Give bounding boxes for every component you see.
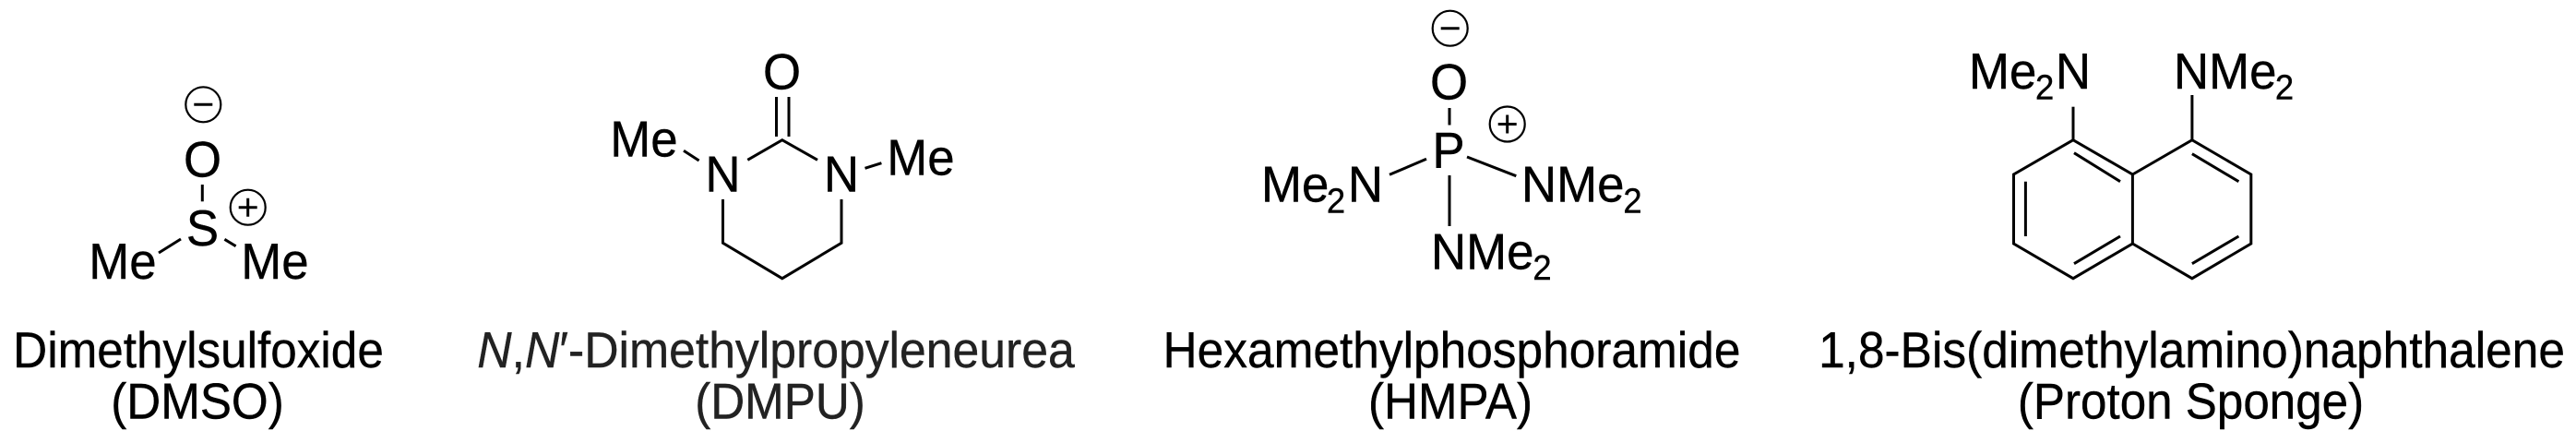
bond: lower P-N [1449, 175, 1450, 226]
ring: naphthalene skeleton [2013, 140, 2251, 279]
bond: left N-Me [684, 150, 699, 161]
icon: positive charge [1490, 107, 1525, 142]
atom: oxygen: O [1430, 54, 1468, 111]
atom: sulfur: S [186, 200, 219, 257]
structure: DMSO molecule [89, 87, 309, 290]
group: right dimethylamino: NMe [2174, 43, 2276, 100]
label: DMPU name: N,N′-Dimethylpropyleneurea [477, 323, 1075, 378]
panel: DMSO [13, 87, 384, 430]
group: left dimethylamino: Me [1261, 156, 1329, 213]
group: lower dimethylamino: NMe [1431, 224, 1533, 281]
label: HMPA abbreviation: (HMPA) [1368, 374, 1532, 430]
atom: carbonyl oxygen: O [763, 44, 801, 101]
structure: HMPA molecule [1261, 11, 1642, 287]
label: HMPA name: Hexamethylphosphoramide [1163, 322, 1740, 378]
group: lower dimethylamino: 2 [1532, 248, 1552, 287]
atom: left nitrogen: N [705, 147, 741, 203]
label: DMSO abbreviation: (DMSO) [111, 374, 284, 430]
atom: left methyl: Me [89, 233, 157, 290]
group: right dimethylamino: NMe [1521, 156, 1624, 213]
panel: DMPU [477, 44, 1075, 430]
icon: negative charge [185, 87, 221, 122]
bond: P-O [1449, 108, 1450, 126]
panel: HMPA [1163, 11, 1740, 430]
bond: right N-Me [865, 163, 881, 168]
bond: left C-N [2072, 107, 2074, 140]
label: DMPU abbreviation: (DMPU) [695, 374, 865, 430]
bond: right C-N [2190, 95, 2193, 140]
atom: oxygen: O [184, 132, 221, 188]
label: Proton Sponge abbreviation: (Proton Sponge) [2018, 374, 2364, 430]
group: right dimethylamino: 2 [1623, 181, 1642, 220]
icon: negative charge [1433, 11, 1468, 46]
label: Proton Sponge name: 1,8-Bis(dimethylamino)naphthalene [1819, 322, 2565, 378]
ring: propylene urea skeleton [723, 140, 841, 279]
bond: left P-N [1389, 159, 1426, 174]
panel: Proton Sponge [1819, 43, 2565, 430]
group: left dimethylamino: Me [1969, 43, 2036, 100]
atom: left methyl: Me [610, 112, 678, 168]
bond: right P-N [1467, 157, 1516, 176]
group: left dimethylamino: N [1348, 156, 1383, 213]
bond: S-O [201, 185, 204, 201]
structure: DMPU molecule [610, 44, 955, 279]
group: left dimethylamino: N [2056, 43, 2091, 100]
atom: right methyl: Me [887, 130, 955, 186]
atom: right nitrogen: N [824, 147, 859, 203]
bond: left S-Me [159, 239, 181, 253]
group: left dimethylamino: 2 [1327, 181, 1345, 220]
group: right dimethylamino: 2 [2275, 67, 2294, 107]
bond: right S-Me [224, 239, 236, 246]
label: DMSO name: Dimethylsulfoxide [13, 322, 384, 378]
icon: positive charge [231, 190, 266, 225]
bonds: inner double bonds [2025, 153, 2238, 264]
structure: Proton Sponge molecule [1969, 43, 2294, 279]
bond: C=O double bond [777, 97, 789, 137]
atom: phosphorus: P [1432, 123, 1465, 179]
group: left dimethylamino: 2 [2035, 67, 2054, 107]
atom: right methyl: Me [241, 233, 309, 290]
